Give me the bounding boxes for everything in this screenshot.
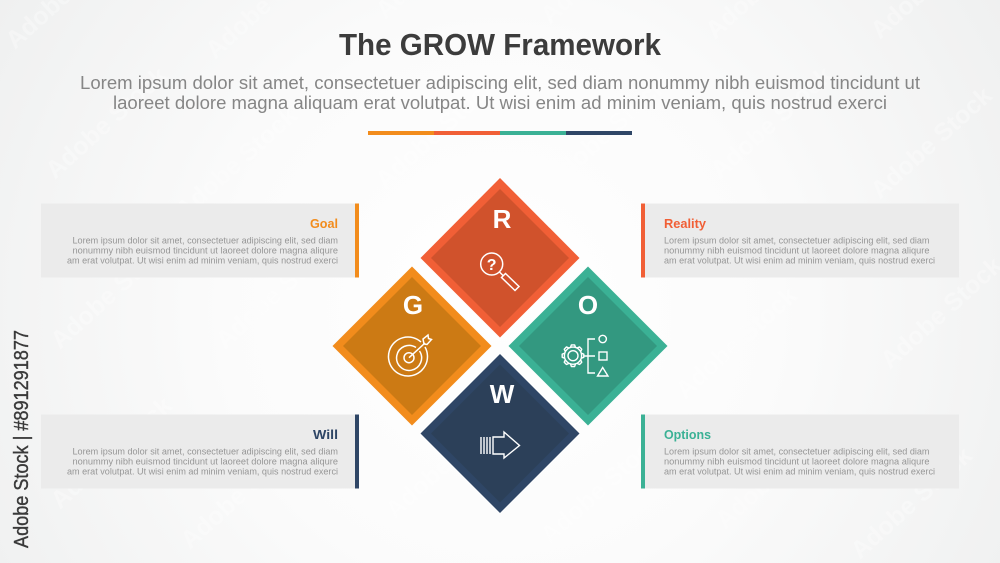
title: The GROW Framework bbox=[339, 27, 662, 62]
text block: Goal description: am erat volutpat. Ut wisi enim ad minim veniam, quis nostrud exerci bbox=[67, 256, 338, 266]
text: Adobe Stock bbox=[210, 231, 343, 354]
text block: Goal description: nonummy nibh euismod tincidunt ut laoreet dolore magna aliqure bbox=[72, 246, 338, 256]
text block: Will description: am erat volutpat. Ut wisi enim ad minim veniam, quis nostrud exerci bbox=[67, 466, 338, 476]
text block: Will description: nonummy nibh euismod tincidunt ut laoreet dolore magna aliqure bbox=[72, 456, 338, 466]
text block: Options description: am erat volutpat. Ut wisi enim ad minim veniam, quis nostrud exerci bbox=[664, 466, 935, 476]
panel: Reality bbox=[641, 204, 959, 278]
text: Adobe Stock bbox=[865, 81, 998, 204]
watermark credit: Adobe Stock | #891291877 bbox=[11, 330, 33, 548]
text block: Options description: Lorem ipsum dolor sit amet, consectetuer adipiscing elit, sed diam bbox=[664, 446, 930, 456]
text: Adobe Stock bbox=[535, 426, 668, 549]
text: Adobe Stock bbox=[710, 411, 843, 534]
icon: magnifier with question mark bbox=[481, 253, 519, 290]
icon: target with arrow bbox=[388, 335, 432, 376]
letter W: W bbox=[490, 379, 515, 409]
text: Adobe Stock bbox=[380, 401, 513, 524]
text block: Reality description: am erat volutpat. Ut wisi enim ad minim veniam, quis nostrud exerci bbox=[664, 256, 935, 266]
text: Adobe Stock bbox=[540, 71, 673, 194]
diamond: W bbox=[420, 354, 580, 513]
text: Adobe Stock bbox=[170, 101, 303, 224]
heading: Reality: Reality bbox=[664, 216, 707, 231]
letter O: O bbox=[578, 290, 598, 320]
heading: Goal: Goal bbox=[310, 216, 338, 231]
icon: gear with options bbox=[562, 335, 608, 376]
text block: Will description bbox=[67, 446, 338, 476]
text block: Options description bbox=[664, 446, 935, 476]
text: Adobe Stock bbox=[40, 61, 173, 184]
diamond: G bbox=[332, 266, 492, 426]
icon: magnifier with question mark: ? bbox=[487, 257, 497, 274]
text: Adobe Stock bbox=[380, 231, 513, 354]
text block: Options description: nonummy nibh euismod tincidunt ut laoreet dolore magna aliqure bbox=[664, 456, 930, 466]
diamond: O bbox=[508, 266, 668, 426]
diamond: R bbox=[420, 178, 580, 338]
letter G: G bbox=[403, 290, 423, 320]
panel: Will bbox=[41, 414, 359, 488]
subtitle text block: laoreet dolore magna aliquam erat volutpat. Ut wisi enim ad minim veniam, quis nostrud exerci bbox=[113, 93, 887, 113]
text: Adobe Stock bbox=[175, 431, 308, 554]
text block: Goal description bbox=[67, 236, 338, 266]
text: Adobe Stock bbox=[45, 391, 178, 514]
panel: Options bbox=[641, 414, 959, 488]
text: Adobe Stock bbox=[370, 71, 503, 194]
subtitle text block: Lorem ipsum dolor sit amet, consectetuer adipiscing elit, sed diam nonummy nibh euismod tincidunt ut bbox=[80, 73, 920, 93]
heading: Will: Will bbox=[313, 427, 338, 442]
icon: arrow with speed lines bbox=[481, 432, 520, 458]
text block: Reality description bbox=[664, 236, 935, 266]
four-colour divider bar bbox=[368, 131, 632, 135]
letter R: R bbox=[493, 204, 512, 234]
text: Adobe Stock bbox=[45, 231, 178, 354]
subtitle text block bbox=[80, 73, 920, 113]
text block: Will description: Lorem ipsum dolor sit amet, consectetuer adipiscing elit, sed diam bbox=[72, 446, 338, 456]
text: Adobe Stock bbox=[670, 281, 803, 404]
panel: Goal bbox=[41, 204, 359, 278]
text block: Reality description: nonummy nibh euismod tincidunt ut laoreet dolore magna aliqure bbox=[664, 246, 930, 256]
text: Adobe Stock bbox=[540, 241, 673, 364]
heading: Options: Options bbox=[664, 427, 711, 442]
text: Adobe Stock bbox=[705, 61, 838, 184]
text: Adobe Stock bbox=[845, 441, 978, 563]
text block: Reality description: Lorem ipsum dolor sit amet, consectetuer adipiscing elit, sed diam bbox=[664, 236, 930, 246]
text block: Goal description: Lorem ipsum dolor sit amet, consectetuer adipiscing elit, sed diam bbox=[72, 236, 338, 246]
